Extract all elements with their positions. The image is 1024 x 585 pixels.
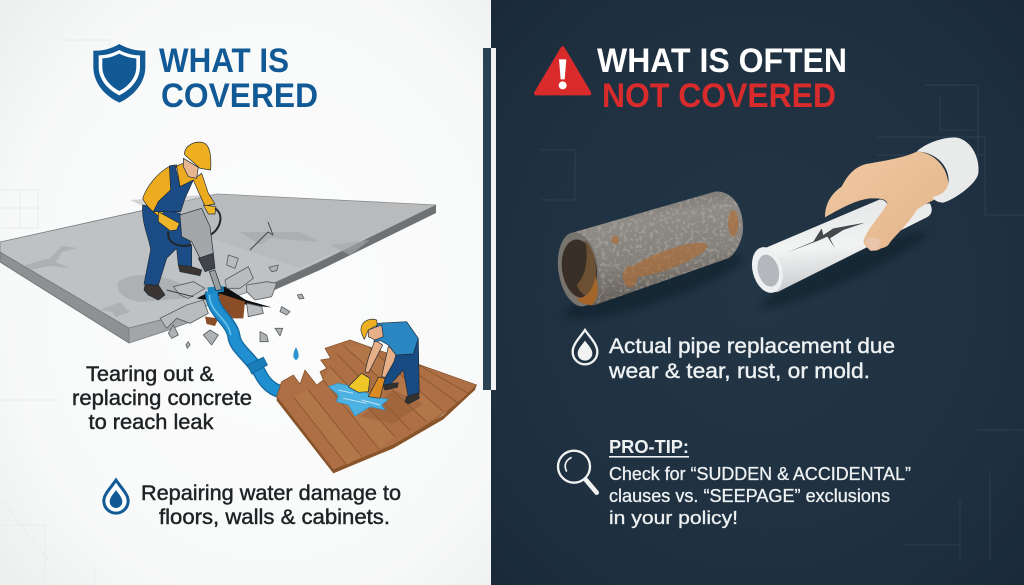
title: what is often not covered: WHAT IS OFTEN [597,42,847,80]
text: tearing out: to reach leak [88,411,214,434]
text: actual pipe replacement: Actual pipe replacement due [609,335,895,358]
icon: water drop (left) [102,477,130,515]
title: what is covered: WHAT IS [159,42,289,80]
debris fragments [168,265,304,348]
text: pro-tip: Check for “SUDDEN & ACCIDENTAL” [609,464,911,484]
text: pro-tip [609,436,911,528]
text: pro-tip: PRO-TIP: [609,436,689,457]
icon: warning triangle [536,48,589,93]
illustration: rusty metal pipe [558,192,743,319]
divider bar [483,48,496,390]
text: tearing out [72,363,252,434]
text: actual pipe replacement: wear & tear, rust, or mold. [608,360,870,383]
illustration: concrete slab [0,194,436,343]
icon: shield [93,44,145,103]
panel: not covered (right background) [491,0,1024,585]
title: what is often not covered: NOT COVERED [602,77,836,115]
text: repairing water damage: Repairing water damage to [141,482,401,505]
illustration: wooden floor [277,340,477,473]
illustration: worker with jackhammer [142,142,222,300]
icon: magnifying glass [558,451,597,493]
blueprint lines right [540,85,1024,560]
illustration: hole with exposed pipe [160,255,284,392]
text: pro-tip: clauses vs. “SEEPAGE” exclusions [609,486,890,506]
title: what is often not covered [597,42,847,115]
title: what is covered: COVERED [161,77,318,115]
text: tearing out: replacing concrete [72,387,252,410]
illustration: water puddle [328,383,388,416]
text: pro-tip: in your policy! [609,508,738,528]
text: actual pipe replacement [608,335,895,383]
illustration: worker cleaning floor [348,319,419,404]
icon: water drop (right) [573,330,597,364]
text: repairing water damage [141,482,401,529]
title: what is covered [159,42,318,115]
illustration: hand holding pipe [825,137,979,251]
panel: covered (left background) [0,0,491,585]
illustration: cracked white pipe [747,199,932,318]
text: repairing water damage: floors, walls & cabinets. [159,506,390,529]
blueprint lines left [0,40,110,585]
text: tearing out: Tearing out & [86,363,214,386]
icon: falling water drop [293,347,299,360]
